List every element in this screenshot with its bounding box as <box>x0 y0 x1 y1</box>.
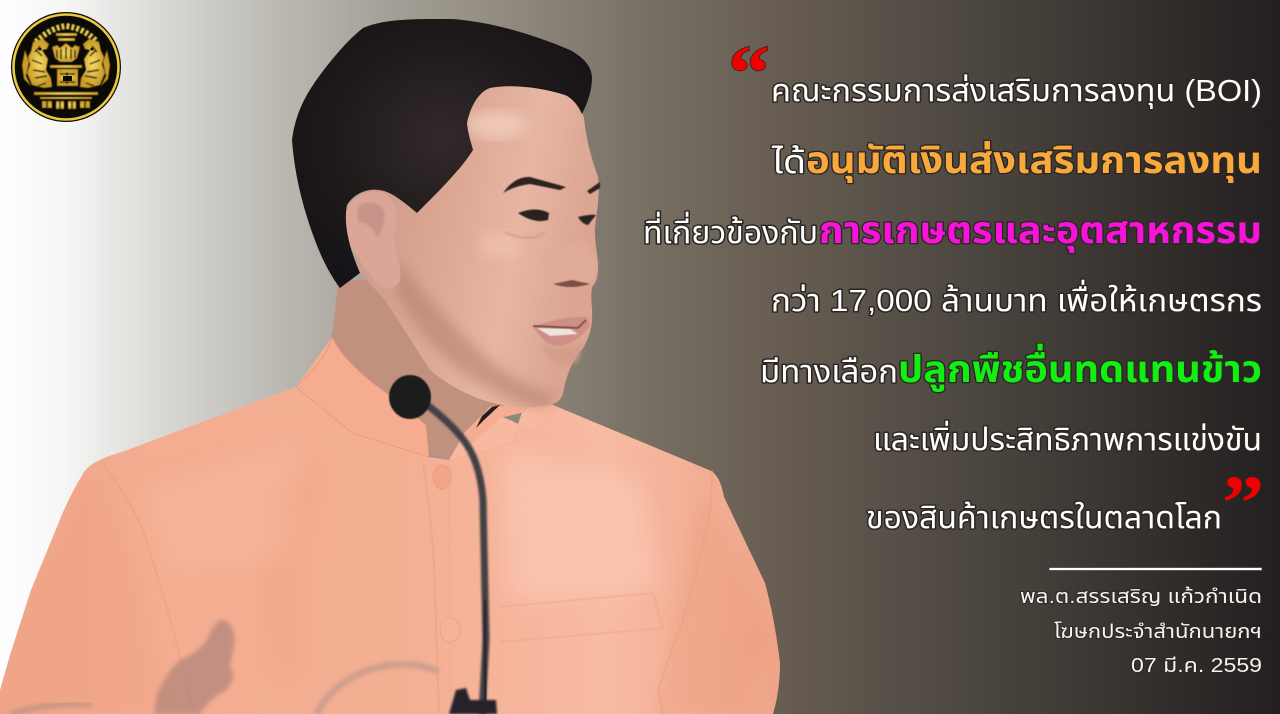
opening quote mark: “ <box>728 29 770 116</box>
divider rule <box>1049 568 1262 570</box>
line 4: กว่า 17,000 ล้านบาท เพื่อให้เกษตรกร <box>771 279 1262 318</box>
microphone base <box>449 688 497 714</box>
eyes <box>518 210 549 221</box>
date: 07 มี.ค. 2559 <box>1131 655 1262 677</box>
line 5: มีทางเลือก <box>760 354 898 389</box>
jacket seams <box>102 462 712 714</box>
neck <box>331 280 540 462</box>
speaker title: โฆษกประจำสำนักนายกฯ <box>1054 621 1262 643</box>
cable shadows <box>316 664 438 714</box>
hand shadow on sleeve <box>154 620 235 714</box>
government seal logo <box>11 12 121 122</box>
closing quote mark: ” <box>1222 459 1264 546</box>
hair <box>292 19 592 288</box>
microphone head <box>389 375 431 419</box>
nose <box>549 238 597 286</box>
head and face <box>345 80 600 408</box>
eyebrows <box>503 177 566 193</box>
ear <box>345 192 400 288</box>
line 5: ปลูกพืชอื่นทดแทนข้าว <box>898 343 1262 392</box>
microphone stem <box>418 398 486 714</box>
line 5 <box>760 343 1262 392</box>
attribution <box>1020 585 1262 677</box>
line 3: การเกษตรและอุตสาหกรรม <box>819 210 1262 253</box>
collar <box>296 337 429 457</box>
jacket body <box>0 337 780 714</box>
mouth <box>533 317 590 346</box>
line 2: อนุมัติเงินส่งเสริมการลงทุน <box>806 140 1262 183</box>
quote text <box>643 73 1262 535</box>
line 3 <box>643 210 1262 253</box>
microphone <box>389 375 497 714</box>
line 7: ของสินค้าเกษตรในตลาดโลก <box>866 500 1222 535</box>
portrait: spokesman at microphone <box>0 19 780 714</box>
line 1: คณะกรรมการส่งเสริมการลงทุน (BOI) <box>771 73 1262 109</box>
line 6: และเพิ่มประสิทธิภาพการแข่งขัน <box>873 420 1262 457</box>
line 2: ได้ <box>771 143 806 180</box>
line 3: ที่เกี่ยวข้องกับ <box>643 211 818 250</box>
jacket buttons <box>433 465 451 489</box>
speaker name: พล.ต.สรรเสริญ แก้วกำเนิด <box>1020 585 1262 608</box>
